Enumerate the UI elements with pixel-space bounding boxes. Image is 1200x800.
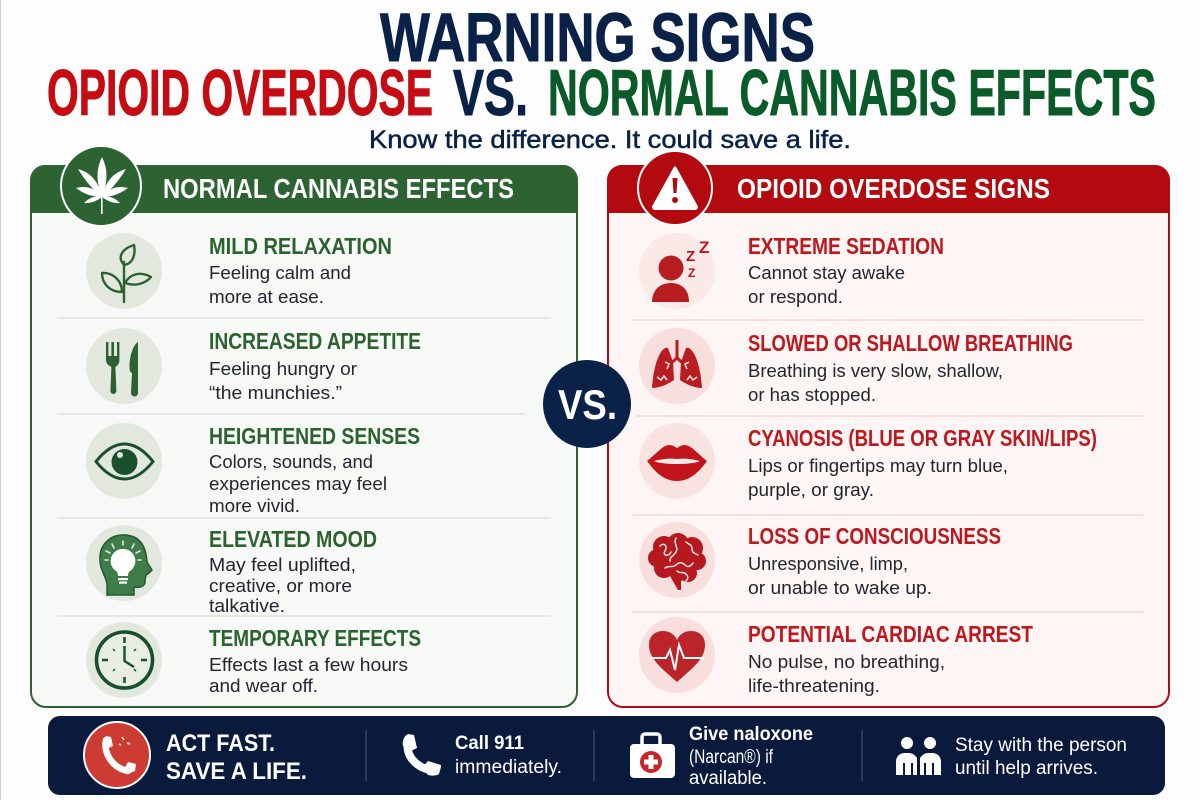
icon: phone: [403, 734, 441, 776]
sign: extreme sedation: Cannot stay awake: [748, 262, 905, 283]
sign: extreme sedation: or respond.: [748, 286, 843, 307]
effect: increased appetite: “the munchies.”: [209, 382, 342, 403]
panel heading: normal cannabis effects: NORMAL CANNABIS EFFECTS: [163, 173, 514, 204]
effect: temporary effects: and wear off.: [209, 675, 318, 696]
title: VS.: [453, 56, 528, 129]
icon: fork and knife: [86, 328, 162, 404]
icon: head with light bulb: [86, 525, 162, 601]
effect: elevated mood: talkative.: [209, 595, 285, 616]
icon: lips: [639, 423, 715, 499]
action: give naloxone: (Narcan®) if: [689, 747, 774, 768]
icon: brain: [639, 522, 715, 598]
action: give naloxone: [630, 724, 813, 789]
sign: cyanosis: [639, 423, 1097, 500]
sign: potential cardiac arrest: life-threatening.: [748, 675, 880, 696]
effect: mild relaxation: more at ease.: [209, 286, 324, 307]
sign: slowed or shallow breathing: SLOWED OR SHALLOW BREATHING: [748, 330, 1073, 356]
effect: mild relaxation: Feeling calm and: [209, 262, 351, 283]
sign: cyanosis: purple, or gray.: [748, 479, 874, 500]
effect: heightened senses: [86, 423, 420, 516]
divider lines: [57, 318, 551, 616]
effect: heightened senses: HEIGHTENED SENSES: [209, 423, 420, 449]
sign: slowed or shallow breathing: [639, 328, 1073, 405]
icon: sleeping person: Z: [688, 266, 695, 280]
action: call 911: [403, 733, 562, 778]
sign: extreme sedation: EXTREME SEDATION: [748, 233, 944, 259]
icon: clock: [86, 622, 162, 698]
icon: heart with pulse: [639, 617, 715, 693]
effect: elevated mood: ELEVATED MOOD: [209, 526, 377, 552]
action: stay with the person: until help arrives.: [955, 758, 1098, 779]
panel heading: opioid overdose signs: OPIOID OVERDOSE SIGNS: [737, 173, 1050, 204]
icon: sleeping person: Z: [699, 238, 709, 257]
title: [47, 0, 1156, 129]
title: WARNING SIGNS: [380, 0, 815, 76]
icon: warning triangle: [638, 151, 712, 225]
sign: loss of consciousness: [639, 522, 1001, 598]
sign: potential cardiac arrest: No pulse, no breathing,: [748, 651, 945, 672]
act fast callout: [84, 722, 307, 788]
icon: first aid kit: [630, 734, 675, 778]
effect: heightened senses: more vivid.: [209, 495, 300, 516]
sign: slowed or shallow breathing: or has stopped.: [748, 384, 876, 405]
effect: elevated mood: creative, or more: [209, 575, 352, 596]
effect: elevated mood: May feel uplifted,: [209, 554, 356, 575]
effect: temporary effects: Effects last a few hours: [209, 654, 408, 675]
act fast callout: ACT FAST.: [166, 730, 275, 757]
effect: mild relaxation: [86, 233, 392, 309]
icon: eye: [86, 423, 162, 499]
panel: normal cannabis effects: [30, 146, 578, 707]
sign: slowed or shallow breathing: Breathing is very slow, shallow,: [748, 360, 1003, 381]
effect: mild relaxation: MILD RELAXATION: [209, 233, 392, 259]
sign: potential cardiac arrest: POTENTIAL CARDIAC ARREST: [748, 621, 1033, 647]
effect: elevated mood: [86, 525, 377, 616]
sign: loss of consciousness: or unable to wake up.: [748, 577, 932, 598]
act fast callout: SAVE A LIFE.: [166, 758, 307, 785]
sign: loss of consciousness: Unresponsive, limp,: [748, 553, 908, 574]
sign: cyanosis: CYANOSIS (BLUE OR GRAY SKIN/LIPS): [748, 425, 1097, 451]
icon: sleeping person: [639, 233, 715, 309]
sign: cyanosis: Lips or fingertips may turn blue,: [748, 455, 1008, 476]
sign: potential cardiac arrest: [639, 617, 1033, 696]
icon: plant: [86, 233, 162, 309]
action: give naloxone: Give naloxone: [689, 724, 813, 745]
effect: heightened senses: experiences may feel: [209, 473, 387, 494]
icon: lungs: [639, 328, 715, 404]
icon: sleeping person: Z: [686, 248, 695, 265]
panel: opioid overdose signs: [607, 151, 1170, 707]
sign: loss of consciousness: LOSS OF CONSCIOUSNESS: [748, 523, 1001, 549]
sign: extreme sedation: [639, 233, 944, 309]
vs badge: VS.: [558, 381, 617, 428]
subtitle: Know the difference. It could save a life.: [369, 126, 851, 154]
action: call 911: Call 911: [455, 733, 524, 754]
title: OPIOID OVERDOSE: [47, 56, 433, 129]
vs badge: [543, 360, 631, 448]
action: give naloxone: available.: [689, 768, 767, 789]
action bar: [48, 716, 1165, 795]
action: call 911: immediately.: [455, 757, 562, 778]
dividers: [366, 730, 862, 781]
icon: cannabis leaf: [61, 146, 141, 226]
action: stay with the person: Stay with the person: [955, 735, 1127, 756]
effect: heightened senses: Colors, sounds, and: [209, 451, 373, 472]
icon: red phone badge: [84, 722, 150, 788]
action: stay with the person: [896, 735, 1127, 779]
effect: increased appetite: INCREASED APPETITE: [209, 328, 421, 354]
effect: temporary effects: [86, 622, 421, 698]
effect: temporary effects: TEMPORARY EFFECTS: [209, 625, 421, 651]
divider lines: [632, 320, 1144, 612]
icon: two people: [896, 737, 941, 775]
effect: increased appetite: [86, 328, 421, 404]
effect: increased appetite: Feeling hungry or: [209, 358, 357, 379]
